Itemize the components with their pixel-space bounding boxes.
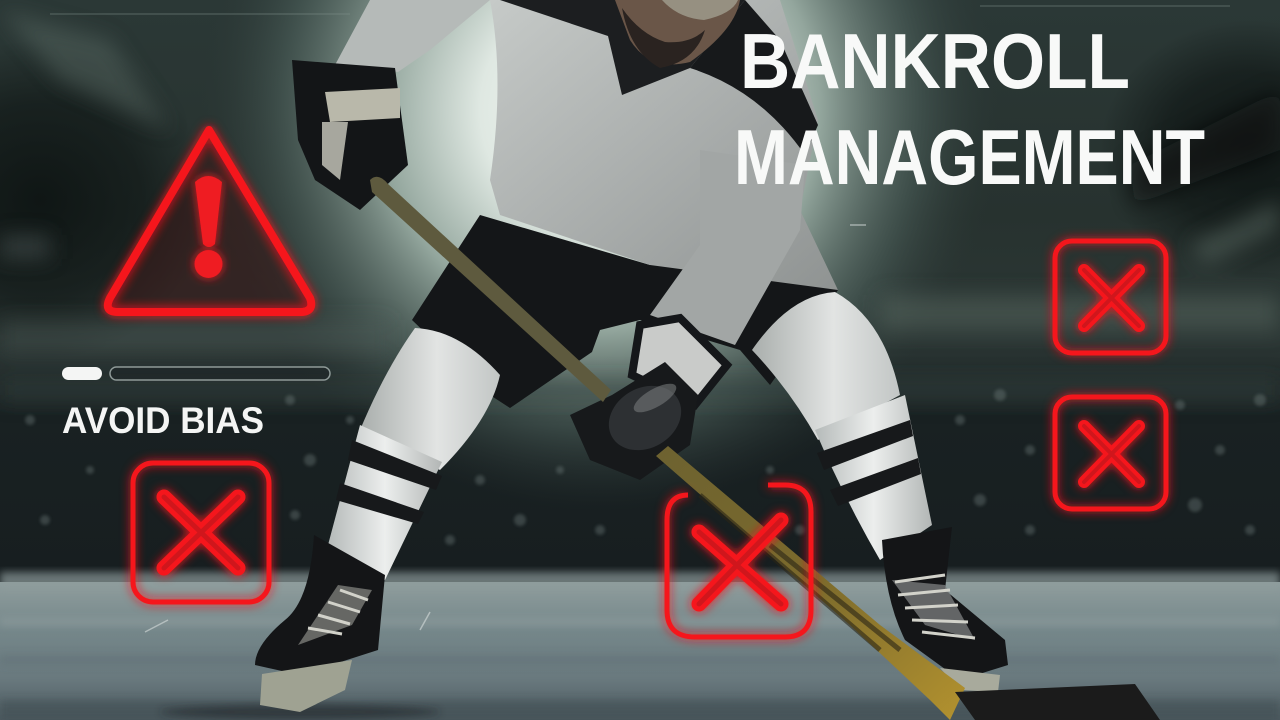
left leg pad xyxy=(360,328,500,470)
left arm sleeve xyxy=(335,0,490,72)
shorts xyxy=(412,215,838,408)
right arm sleeve xyxy=(650,150,805,345)
progress bar xyxy=(62,367,330,380)
x icon: center bottom xyxy=(667,485,811,637)
face and beard xyxy=(615,0,740,64)
visor xyxy=(662,0,738,20)
left glove xyxy=(292,60,408,210)
label: avoid bias: AVOID BIAS xyxy=(62,400,264,441)
ice surface xyxy=(0,225,1280,720)
x icon: lower left xyxy=(133,463,269,602)
hockey player xyxy=(160,0,1008,719)
title xyxy=(734,17,1205,201)
right leg pad xyxy=(752,292,900,440)
left skate xyxy=(255,535,385,675)
elbow guard and right glove xyxy=(632,318,727,405)
hockey stick xyxy=(370,177,1160,720)
x icon: upper right xyxy=(1055,241,1166,353)
left sock xyxy=(328,425,442,580)
jersey torso xyxy=(490,0,838,290)
title: BANKROLL xyxy=(740,17,1130,105)
warning triangle icon xyxy=(108,130,311,312)
x icon: lower right xyxy=(1055,397,1166,509)
right sock xyxy=(815,395,932,560)
right skate xyxy=(882,527,1008,680)
